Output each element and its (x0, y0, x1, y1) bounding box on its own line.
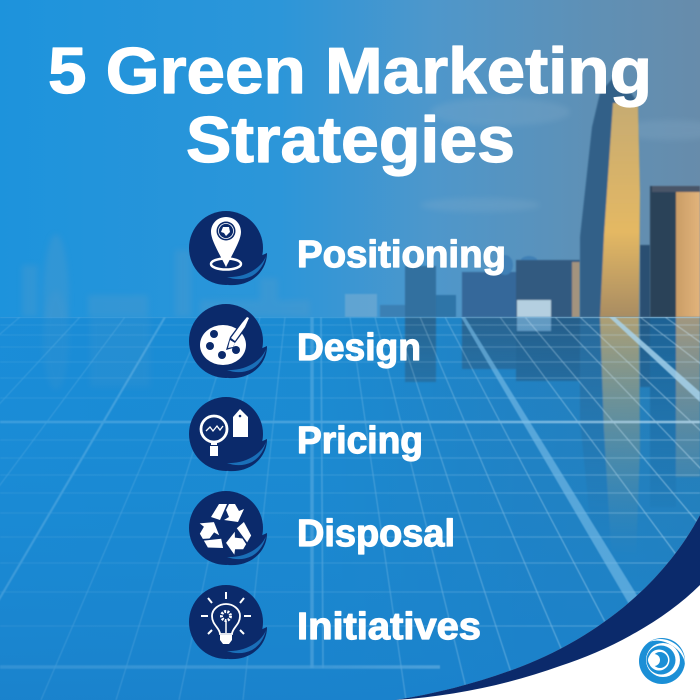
label: Design: Design (297, 327, 421, 369)
icon: map pin with globe (Positioning) (189, 211, 267, 285)
icon: paint palette (Design) (189, 304, 267, 378)
label: Disposal: Disposal (297, 513, 455, 555)
label: Positioning: Positioning (297, 234, 506, 276)
tower right slim block (640, 245, 650, 317)
tall tower (580, 73, 640, 317)
logo: blue swirl (639, 638, 685, 684)
label: Pricing: Pricing (297, 420, 423, 462)
mid skyline (345, 255, 580, 317)
panel grid (0, 317, 700, 700)
solar panel surface (0, 317, 700, 700)
faint left skyline (22, 236, 308, 317)
solar panel rails (461, 317, 640, 606)
right tall building (650, 186, 700, 317)
left panel reflection (46, 317, 148, 385)
sky (0, 0, 700, 318)
label: Initiatives: Initiatives (297, 606, 481, 648)
faint clouds (420, 98, 700, 212)
reflection of skyline (404, 317, 700, 529)
icon: magnifier and price tag (Pricing) (189, 397, 267, 471)
icon: recycling arrows (Disposal) (189, 491, 267, 565)
title: 5 Green Marketing (48, 34, 652, 107)
title: Strategies (186, 103, 515, 176)
icon: light bulb with gear (Initiatives) (189, 585, 267, 659)
bottom-right dark blue swoosh (395, 515, 700, 700)
title (48, 34, 652, 176)
